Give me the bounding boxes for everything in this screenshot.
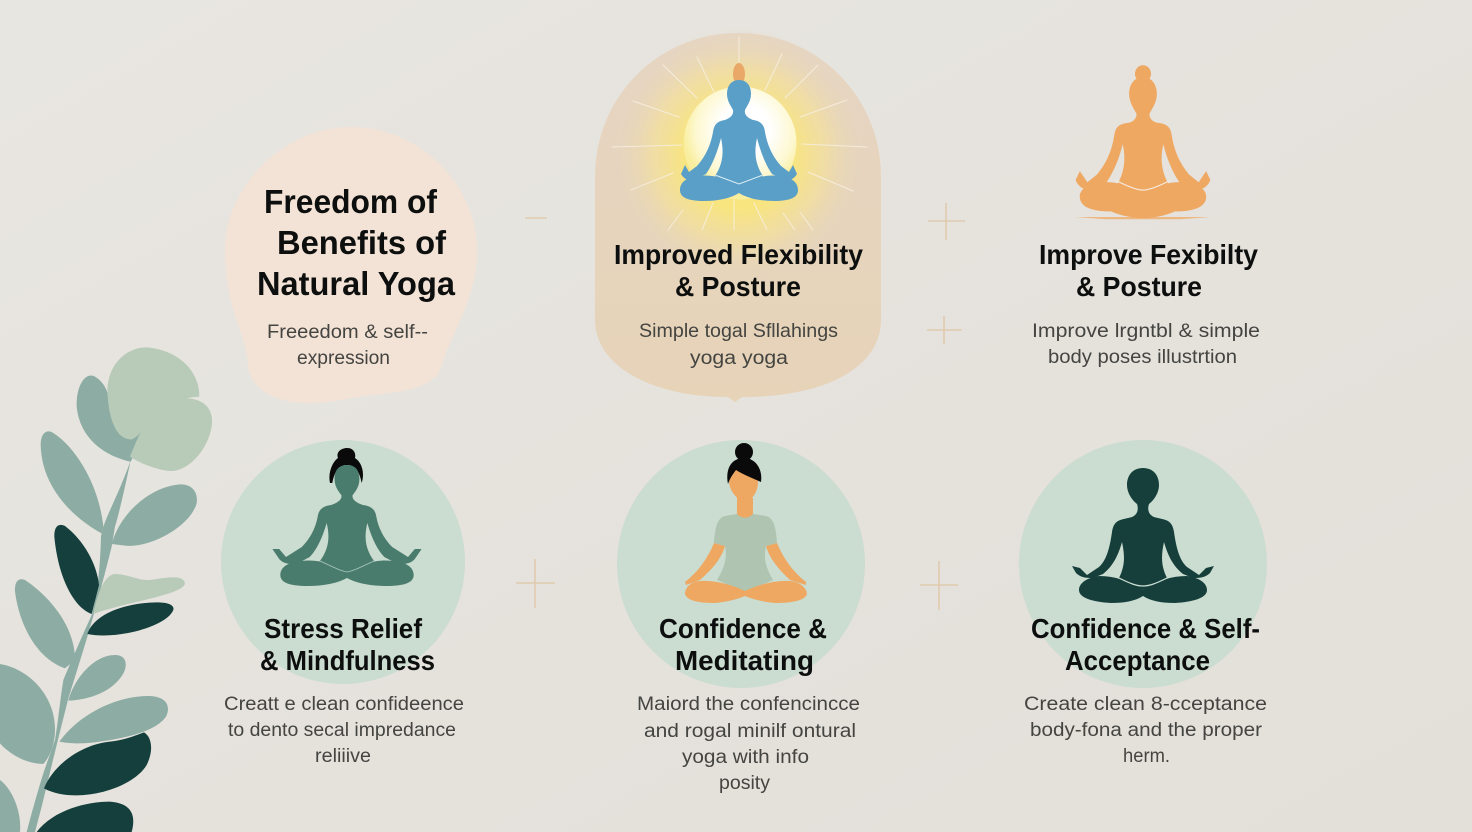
description <box>224 694 464 767</box>
title: Natural Yoga <box>257 265 456 302</box>
plus connectors <box>516 203 965 610</box>
title <box>257 183 456 302</box>
heading: Improved Flexibility <box>614 239 863 270</box>
title: Freedom of <box>264 183 438 220</box>
panel: confidence and meditating <box>617 440 865 794</box>
heading: Meditating <box>675 645 814 676</box>
title description <box>267 322 428 369</box>
description: body poses illustrtion <box>1048 347 1237 368</box>
description: herm. <box>1123 746 1170 767</box>
heading <box>659 613 827 676</box>
title: Benefits of <box>277 224 447 261</box>
icon: orange meditating figure <box>1076 65 1210 219</box>
heading <box>1031 613 1260 676</box>
peach blob <box>225 127 477 403</box>
green circle <box>1019 440 1267 688</box>
icon: green meditating figure <box>272 448 422 586</box>
arch background <box>595 33 881 402</box>
heading: & Mindfulness <box>260 645 435 676</box>
description: Creatt e clean confideence <box>224 694 464 715</box>
sun glow <box>611 27 867 283</box>
description: Create clean 8-cceptance <box>1024 694 1267 715</box>
heading: Confidence & <box>659 613 827 644</box>
heading: Stress Relief <box>264 613 423 644</box>
heading: & Posture <box>1076 271 1202 302</box>
description: yoga with info <box>682 747 809 768</box>
heading <box>1039 239 1258 302</box>
description <box>639 321 838 369</box>
description: yoga yoga <box>690 348 788 369</box>
description <box>637 694 860 794</box>
heading <box>260 613 435 676</box>
description: Improve lrgntbl & simple <box>1032 321 1260 342</box>
heading: Improve Fexibilty <box>1039 239 1258 270</box>
description: Maiord the confencincce <box>637 694 860 715</box>
description: Simple togal Sfllahings <box>639 321 838 342</box>
icon: blue meditating figure <box>680 63 798 201</box>
description: and rogal minilf ontural <box>644 721 856 742</box>
description: body-fona and the proper <box>1030 720 1263 741</box>
heading: & Posture <box>675 271 801 302</box>
heading: Confidence & Self- <box>1031 613 1260 644</box>
heading <box>614 239 863 302</box>
panel: confidence and self-acceptance <box>1019 440 1267 767</box>
title description: expression <box>297 348 390 369</box>
description <box>1032 321 1260 368</box>
heading: Acceptance <box>1065 645 1210 676</box>
description: posity <box>719 773 771 794</box>
panel: stress relief <box>221 440 465 767</box>
green circle <box>617 440 865 688</box>
decorative plant <box>0 347 212 832</box>
panel: improve flexibility orange <box>1032 65 1260 368</box>
icon: dark meditating figure <box>1072 468 1214 603</box>
green circle <box>221 440 465 684</box>
description <box>1024 694 1267 767</box>
panel: freedom title <box>225 127 477 403</box>
title description: Freeedom & self-- <box>267 322 428 343</box>
panel: improved flexibility arch <box>595 27 881 402</box>
icon: meditating woman in green shirt <box>685 443 807 603</box>
description: to dento secal impredance <box>228 720 456 741</box>
description: reliiive <box>315 746 371 767</box>
